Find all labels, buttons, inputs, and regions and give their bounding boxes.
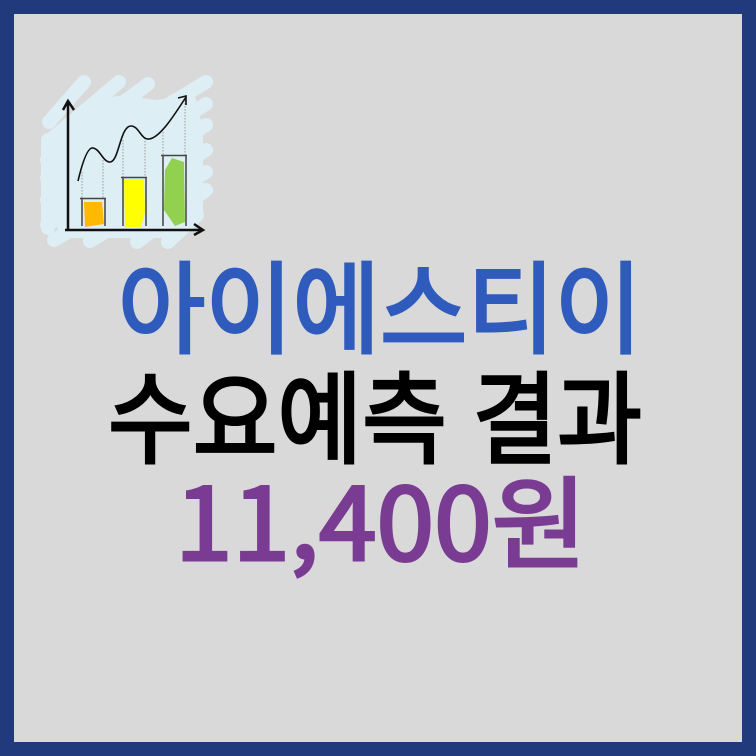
- icon: hand-drawn growth chart: [47, 82, 206, 242]
- chart axes: [63, 101, 203, 235]
- green bar: [161, 156, 187, 226]
- title: company name: 아이에스티이: [118, 229, 642, 374]
- yellow bar: [121, 178, 147, 227]
- subtitle: demand forecast result: 수요예측 결과: [108, 339, 642, 484]
- icon backdrop: pale blue scribble: [47, 82, 206, 242]
- price value: 11,400원: [175, 444, 587, 589]
- dotted guide lines: [82, 100, 185, 198]
- orange bar: [80, 198, 106, 227]
- trend line arrow: [78, 96, 186, 181]
